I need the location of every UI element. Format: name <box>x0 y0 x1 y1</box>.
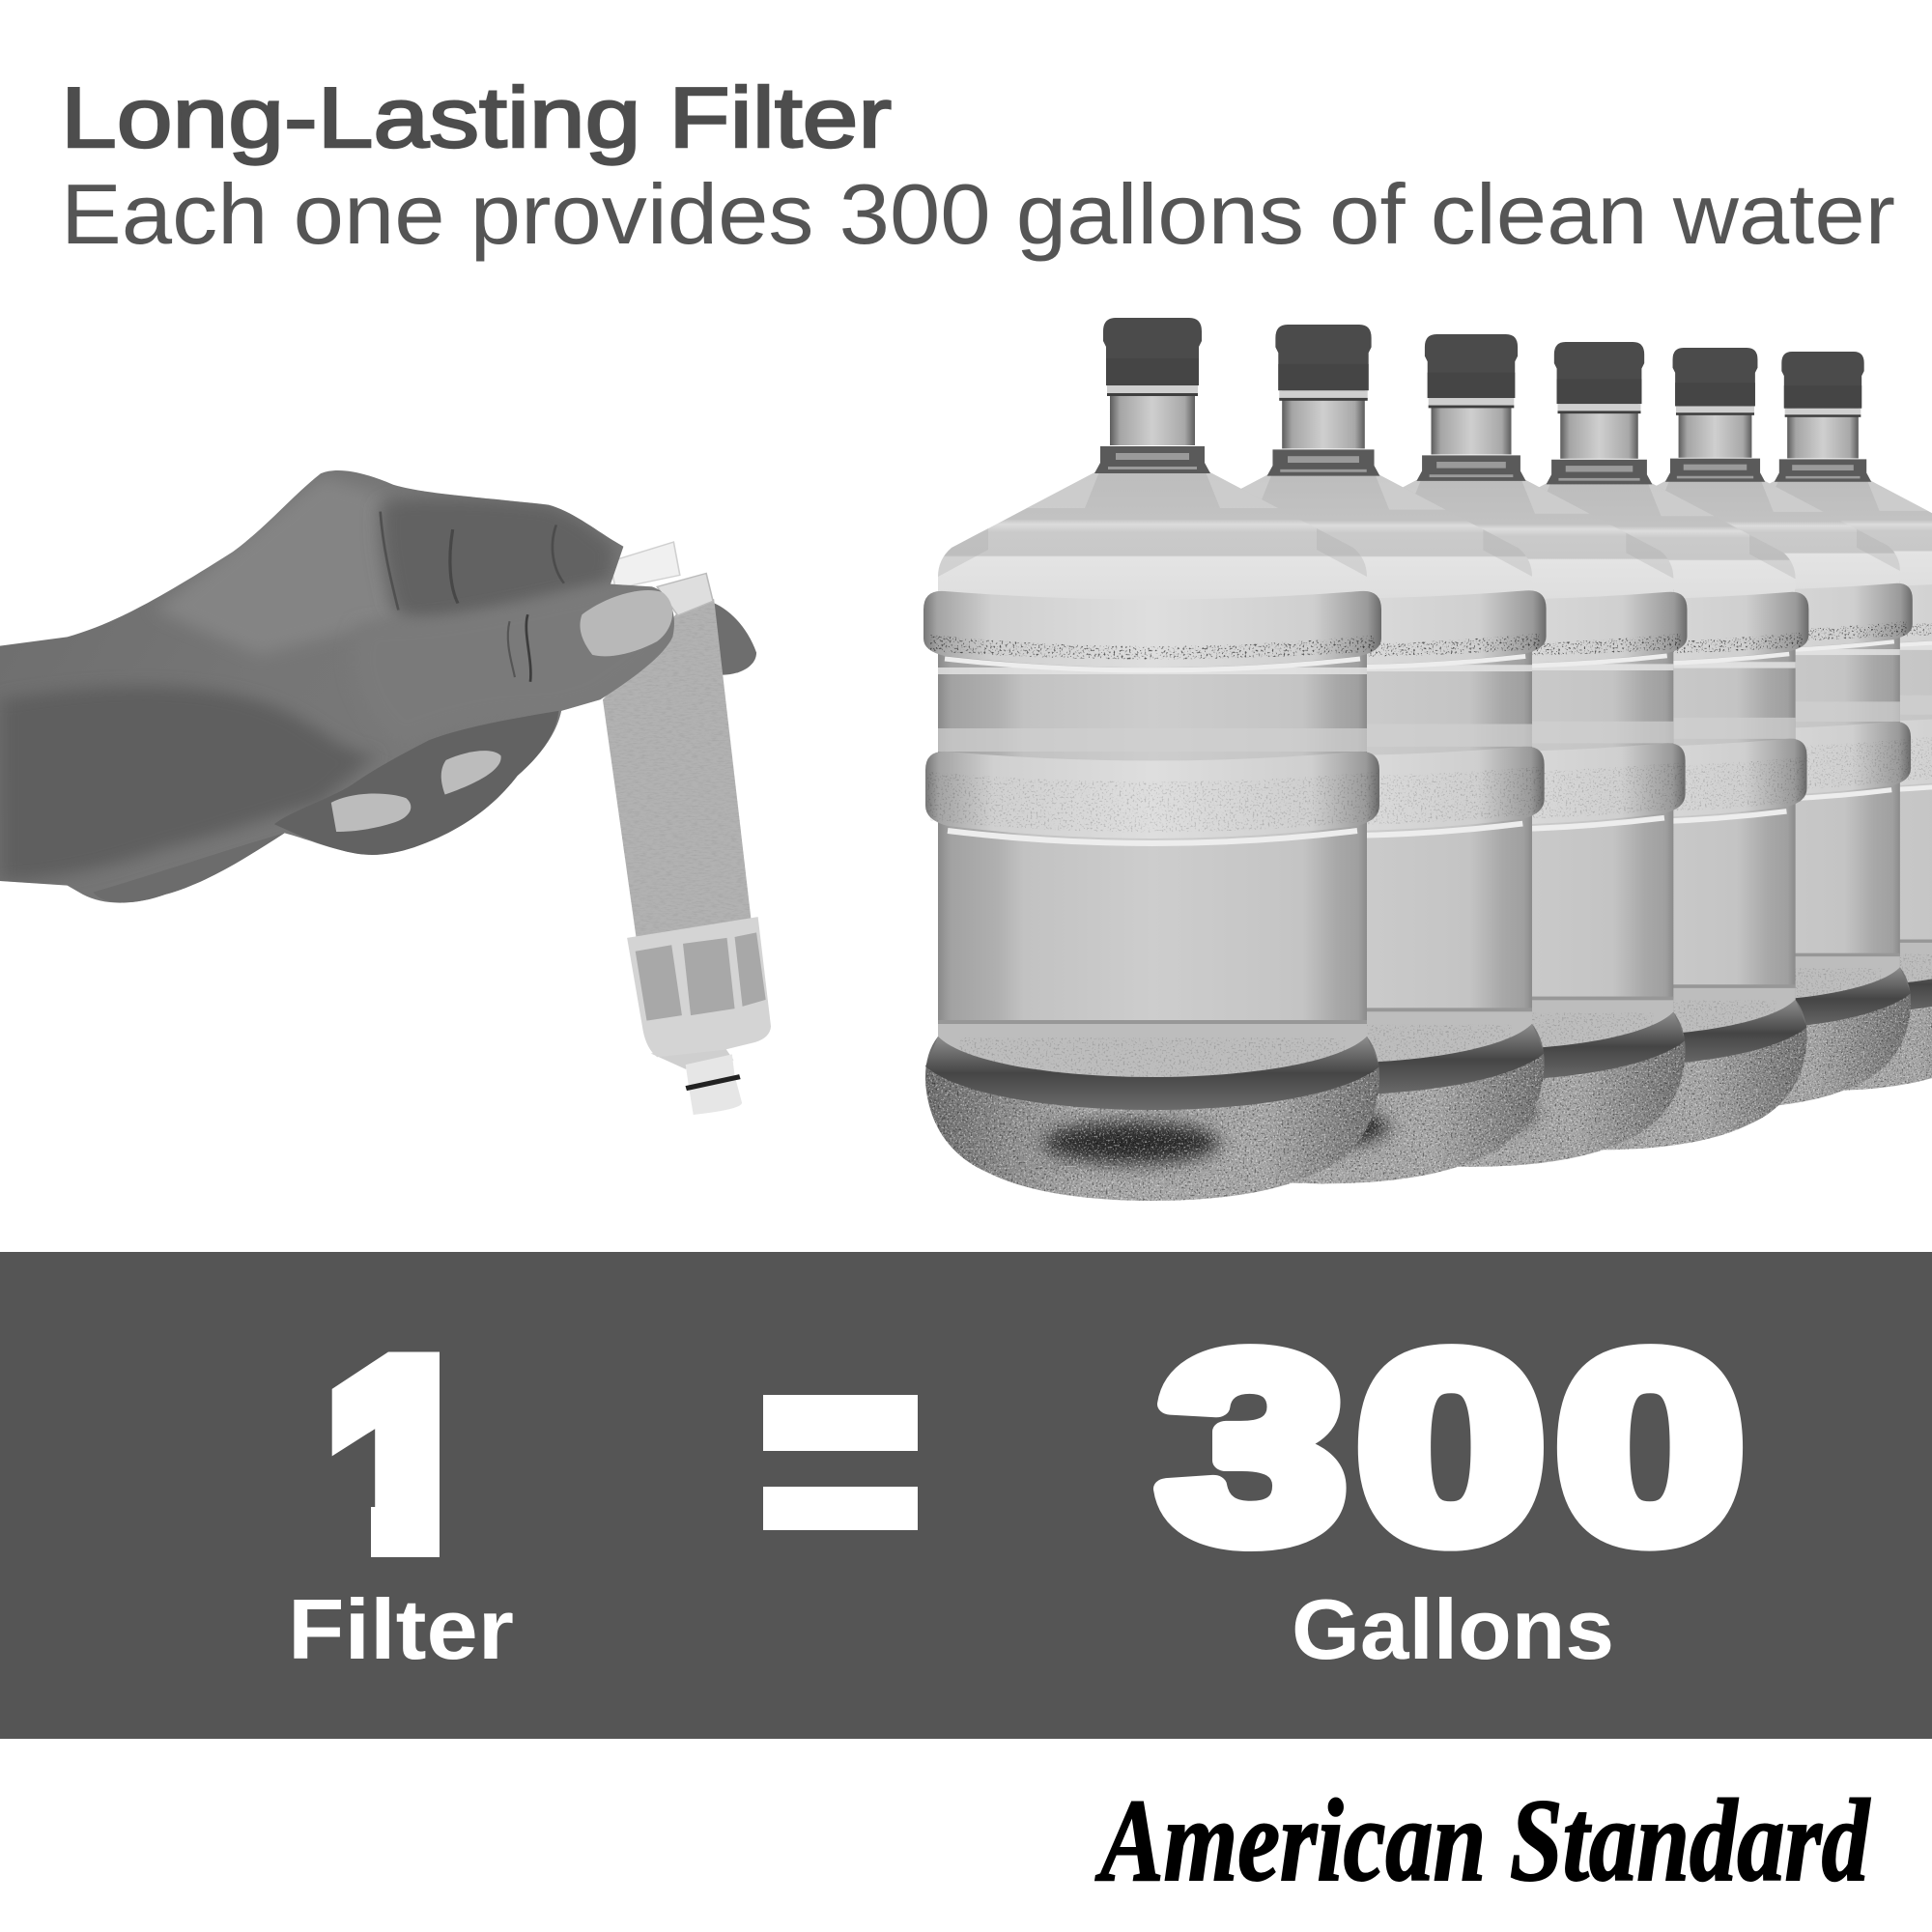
numeral 1: 1 <box>330 1312 475 1607</box>
equals sign: = <box>753 1270 927 1659</box>
fingertip behind filter <box>709 601 756 675</box>
bottle 4 <box>1390 342 1808 1150</box>
numeral 300: 300 <box>1159 1300 1756 1594</box>
filter cartridge <box>603 542 771 1115</box>
photo: water bottles <box>923 318 1932 1201</box>
photo: hand holding filter <box>0 470 771 1115</box>
label: Filter: Filter <box>288 1581 514 1677</box>
label: Gallons: Gallons <box>1292 1581 1614 1677</box>
bottle 5 <box>1518 348 1913 1109</box>
hand shading <box>0 475 674 902</box>
dark equation band <box>0 1252 1932 1739</box>
equation: 1 Filter <box>294 1352 513 1660</box>
bottle 1 <box>923 318 1381 1201</box>
equation: 300 Gallons <box>1159 1300 1756 1677</box>
title: Long-Lasting Filter <box>61 70 892 165</box>
bottle 2 <box>1100 325 1547 1183</box>
bottle 3 <box>1256 334 1687 1167</box>
hand <box>0 470 674 903</box>
subtitle: Each one provides 300 gallons of clean water <box>61 166 1895 262</box>
bottle 6 <box>1632 352 1932 1091</box>
